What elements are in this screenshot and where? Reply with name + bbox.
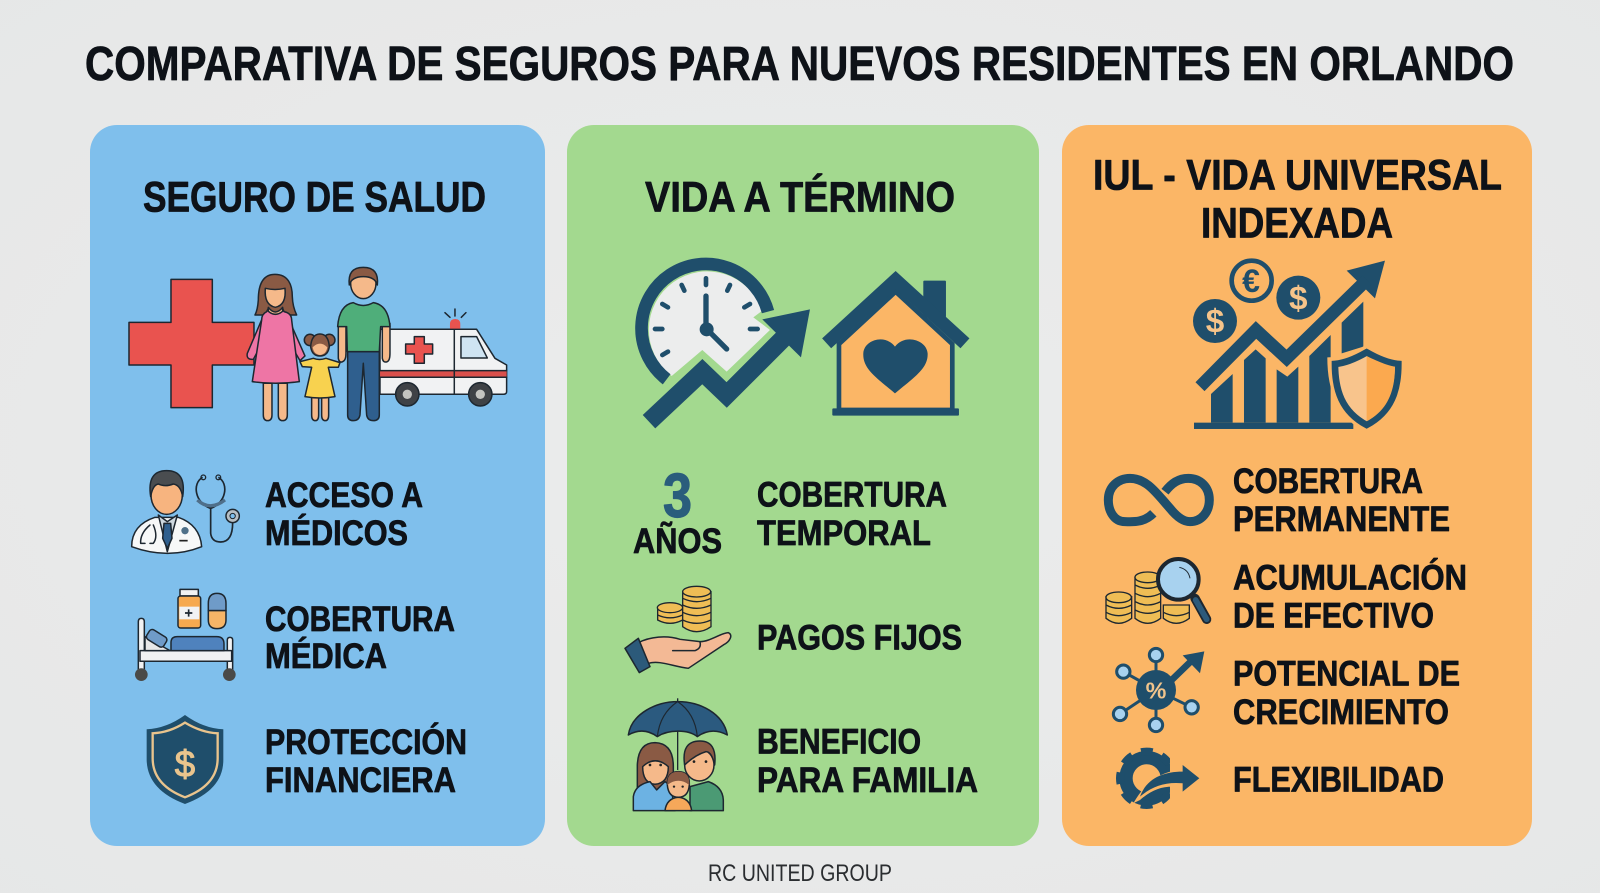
icon: coins, growth chart and shield: € — [1242, 263, 1260, 299]
icon: doctor and stethoscope — [132, 471, 239, 553]
panel: IUL vida universal indexada — [1062, 125, 1532, 846]
panel: vida a término — [567, 125, 1039, 846]
father — [338, 267, 390, 421]
item text: cobertura permanente: PERMANENTE — [1233, 500, 1450, 539]
icon: growth network with percent — [1113, 648, 1204, 732]
item text: cobertura médica — [265, 600, 455, 676]
icon: coins, growth chart and shield: $ — [1289, 280, 1308, 317]
icon: shield with dollar — [147, 715, 223, 804]
icon: house with heart — [827, 280, 965, 416]
item text: cobertura permanente: COBERTURA — [1233, 462, 1423, 501]
panel: seguro de salud — [90, 125, 545, 846]
item text: acumulación de efectivo — [1233, 558, 1467, 636]
heading: IUL vida universal indexada — [1093, 152, 1502, 248]
item text: acumulación de efectivo: DE EFECTIVO — [1233, 596, 1434, 636]
item text: cobertura médica: MÉDICA — [265, 636, 387, 676]
icon: 3 años: 3 — [663, 462, 692, 531]
child — [300, 334, 340, 421]
icon: clock with rising arrow — [642, 264, 810, 422]
heading: vida a término: VIDA A TÉRMINO — [645, 174, 955, 222]
footer: RC UNITED GROUP — [708, 860, 892, 887]
item text: beneficio para familia — [757, 722, 978, 800]
item text: acceso a médicos: MÉDICOS — [265, 513, 408, 553]
item text: beneficio para familia: PARA FAMILIA — [757, 761, 978, 800]
icon: infinity — [1108, 478, 1209, 522]
mother — [247, 274, 305, 421]
heading: IUL vida universal indexada: INDEXADA — [1201, 200, 1393, 248]
item text: acceso a médicos — [265, 476, 423, 553]
icon: red cross, family and ambulance — [129, 267, 507, 421]
item text: cobertura temporal: COBERTURA — [757, 476, 947, 514]
icon: coins, growth chart and shield: $ — [1206, 304, 1225, 341]
icon: gear with arrow — [1120, 752, 1203, 805]
item text: protección financiera — [265, 722, 467, 800]
icon: coins and magnifier — [1106, 559, 1207, 623]
item text: cobertura médica: COBERTURA — [265, 600, 455, 639]
icon: 3 años: AÑOS — [633, 522, 722, 561]
item text: protección financiera: PROTECCIÓN — [265, 722, 467, 762]
icon: hospital bed and medicine — [135, 589, 236, 681]
ambulance — [380, 309, 507, 406]
heading: IUL vida universal indexada: IUL - VIDA UNIVERSAL — [1093, 152, 1502, 200]
item text: pagos fijos: PAGOS FIJOS — [757, 618, 962, 658]
item text: acceso a médicos: ACCESO A — [265, 476, 423, 515]
heading: seguro de salud: SEGURO DE SALUD — [143, 174, 486, 222]
item text: beneficio para familia: BENEFICIO — [757, 722, 921, 762]
icon: shield with dollar: $ — [175, 744, 195, 785]
item text: potencial de crecimiento — [1233, 654, 1460, 732]
icon: growth network with percent: % — [1146, 677, 1167, 703]
icon: 3 años — [633, 462, 722, 561]
item text: acumulación de efectivo: ACUMULACIÓN — [1233, 558, 1467, 598]
item text: flexibilidad: FLEXIBILIDAD — [1233, 760, 1444, 800]
item text: cobertura temporal: TEMPORAL — [757, 514, 931, 553]
item text: protección financiera: FINANCIERA — [265, 761, 456, 800]
icon: hand with coins — [625, 586, 731, 673]
item text: potencial de crecimiento: CRECIMIENTO — [1233, 693, 1449, 732]
item text: cobertura temporal — [757, 476, 947, 553]
item text: cobertura permanente — [1233, 462, 1450, 539]
icon: family under umbrella — [628, 698, 727, 811]
icon: coins, growth chart and shield — [1193, 261, 1406, 433]
item text: potencial de crecimiento: POTENCIAL DE — [1233, 654, 1460, 694]
